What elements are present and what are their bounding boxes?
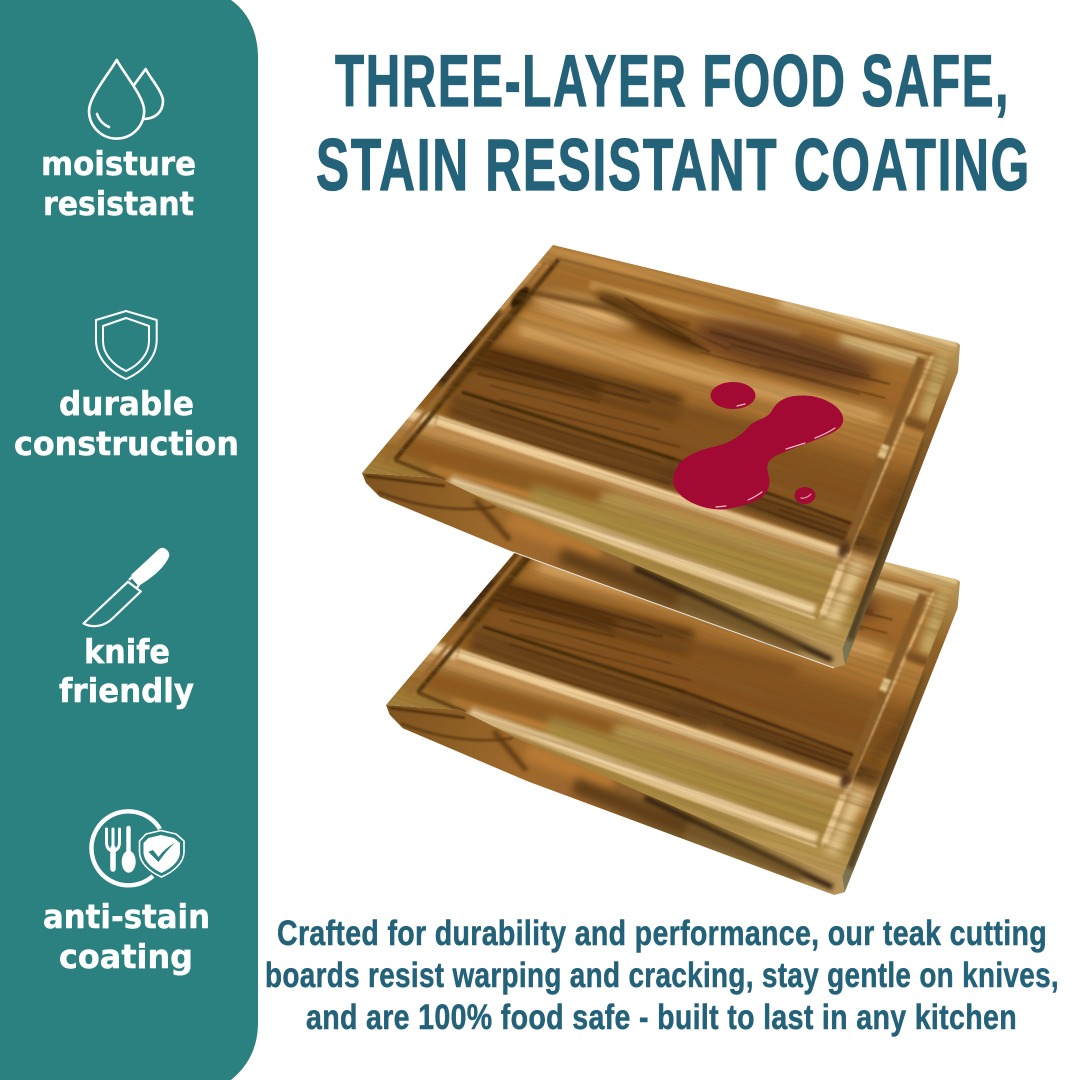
icon: knife — [84, 548, 169, 626]
label: knife friendly: knife — [84, 632, 170, 671]
icon: water drops — [89, 60, 163, 139]
label: knife friendly — [59, 632, 194, 710]
lower teak cutting board — [200, 300, 1080, 971]
label: anti-stain coating: anti-stain — [43, 897, 210, 936]
panel: teal benefits sidebar — [0, 0, 258, 1080]
icon: shield — [96, 311, 157, 379]
label: anti-stain coating: coating — [59, 937, 193, 976]
label: durable construction: durable — [59, 384, 194, 423]
description text — [265, 914, 1059, 1037]
label: knife friendly: friendly — [59, 671, 194, 710]
icon: plate with cutlery and check shield — [91, 811, 184, 885]
label: moisture resistant: resistant — [43, 184, 194, 223]
label: anti-stain coating — [43, 897, 210, 976]
title — [316, 41, 1031, 206]
red wine spill on board — [674, 382, 842, 508]
label: durable construction: construction — [14, 424, 239, 463]
label: moisture resistant: moisture — [41, 144, 196, 183]
upper teak cutting board — [172, 56, 1080, 745]
label: moisture resistant — [41, 144, 196, 223]
label: durable construction — [14, 384, 239, 463]
